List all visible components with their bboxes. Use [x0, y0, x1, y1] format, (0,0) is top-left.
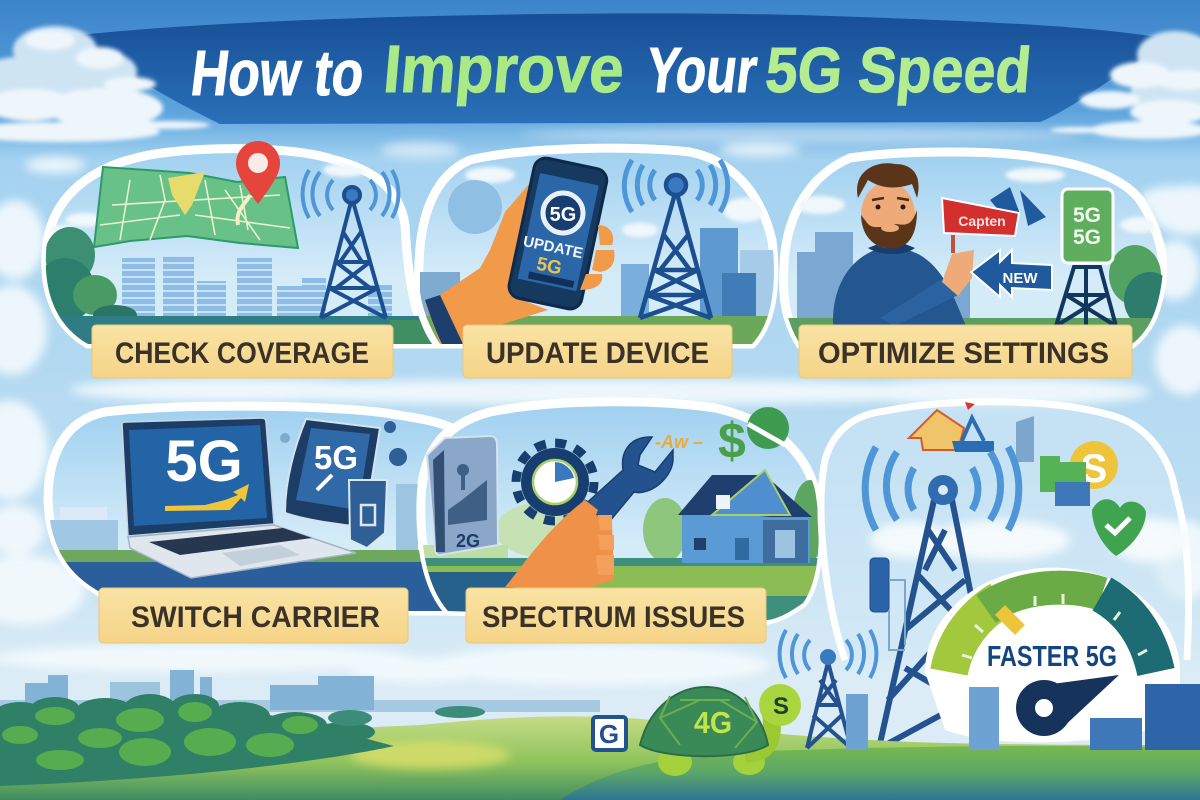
panel: check coverage	[35, 141, 440, 346]
icon: dollar symbols	[655, 407, 789, 469]
icon: money and check shield	[1040, 441, 1146, 556]
label: check coverage	[92, 325, 393, 378]
label: spectrum issues: SPECTRUM ISSUES	[482, 601, 745, 634]
icon: tower	[624, 160, 728, 318]
label: optimize settings: OPTIMIZE SETTINGS	[818, 337, 1109, 370]
icon: laptop	[122, 418, 356, 578]
label: check coverage: CHECK COVERAGE	[115, 337, 369, 370]
background: distant skyline	[0, 670, 600, 712]
top right clouds	[1050, 31, 1200, 139]
chart: speedometer gauge	[925, 568, 1180, 742]
icon: hand holding phone: 5G	[550, 204, 576, 226]
clouds in panel	[870, 518, 1190, 562]
icon: SIM card	[427, 436, 498, 555]
icon: money and check shield: S	[1081, 447, 1107, 491]
label: switch carrier: SWITCH CARRIER	[131, 601, 380, 634]
city skyline	[122, 256, 392, 320]
icon: dollar symbols: $	[718, 413, 746, 469]
icon: house	[678, 470, 812, 563]
title: How to	[187, 37, 368, 109]
icon: small tower	[780, 630, 876, 748]
foreground: green meadow	[0, 716, 1200, 800]
title	[187, 32, 1034, 109]
icon: tablet: 5G	[314, 439, 358, 476]
icon: house and tools	[909, 402, 1034, 462]
title: Your	[642, 34, 761, 106]
icon: tablet	[280, 419, 407, 527]
city skyline	[420, 228, 776, 320]
icon: map	[94, 167, 298, 248]
small clouds	[795, 168, 1160, 233]
icon: hand holding phone: UPDATE	[522, 233, 584, 262]
icon: G badge	[593, 717, 626, 750]
panel: faster 5G	[821, 402, 1190, 748]
small clouds	[46, 163, 367, 235]
icon: 5G sign tower: 5G	[1073, 226, 1101, 249]
title banner	[70, 13, 1172, 124]
city skyline	[48, 484, 418, 555]
panel: switch carrier	[40, 406, 470, 622]
icon: gear	[516, 443, 594, 521]
label: switch carrier	[99, 588, 408, 643]
background clouds	[0, 128, 1200, 685]
icon: SIM card: 2G	[456, 531, 480, 551]
icon: tower	[303, 170, 398, 318]
foreground: city blocks right	[846, 684, 1200, 750]
faint gear	[448, 180, 502, 234]
illustration: turtle with 4G shell: S	[773, 693, 789, 720]
icon: location pin	[236, 141, 280, 204]
panel: optimize settings	[783, 152, 1176, 346]
small clouds	[465, 167, 767, 237]
icon: red sign and arrows: NEW	[1002, 270, 1038, 287]
label: update device: UPDATE DEVICE	[486, 337, 709, 370]
icon: hand holding phone: 5G	[535, 254, 564, 280]
panel: update device	[410, 148, 780, 348]
title: 5G Speed	[763, 34, 1034, 106]
icon: hand holding phone	[425, 156, 614, 344]
icon: G badge: G	[599, 719, 619, 749]
label: spectrum issues	[466, 588, 766, 643]
panel: spectrum issues	[418, 402, 830, 626]
top left clouds	[0, 26, 210, 142]
label: optimize settings	[799, 325, 1132, 378]
illustration: turtle with 4G shell	[640, 684, 801, 776]
icon: 5G sign tower	[1056, 189, 1116, 326]
icon: phone badge	[349, 480, 387, 548]
label: update device	[463, 325, 732, 378]
icon: 5G sign tower: 5G	[1073, 204, 1101, 227]
trees	[46, 227, 137, 322]
foreground: tree line	[0, 694, 485, 786]
icon: dollar symbols: -Aw –	[655, 432, 703, 452]
illustration: turtle with 4G shell: 4G	[694, 705, 732, 740]
icon: red sign and arrows	[942, 187, 1052, 297]
illustration: man with beard	[833, 163, 974, 326]
title: Improve	[381, 32, 627, 107]
icon: red sign and arrows: Capten	[958, 213, 1006, 229]
icon: large tower with signal waves	[865, 447, 1019, 748]
icon: wrench in hand	[505, 437, 673, 590]
icon: laptop: 5G	[165, 429, 243, 494]
chart: speedometer gauge: FASTER 5G	[987, 641, 1117, 673]
city skyline	[797, 232, 970, 322]
